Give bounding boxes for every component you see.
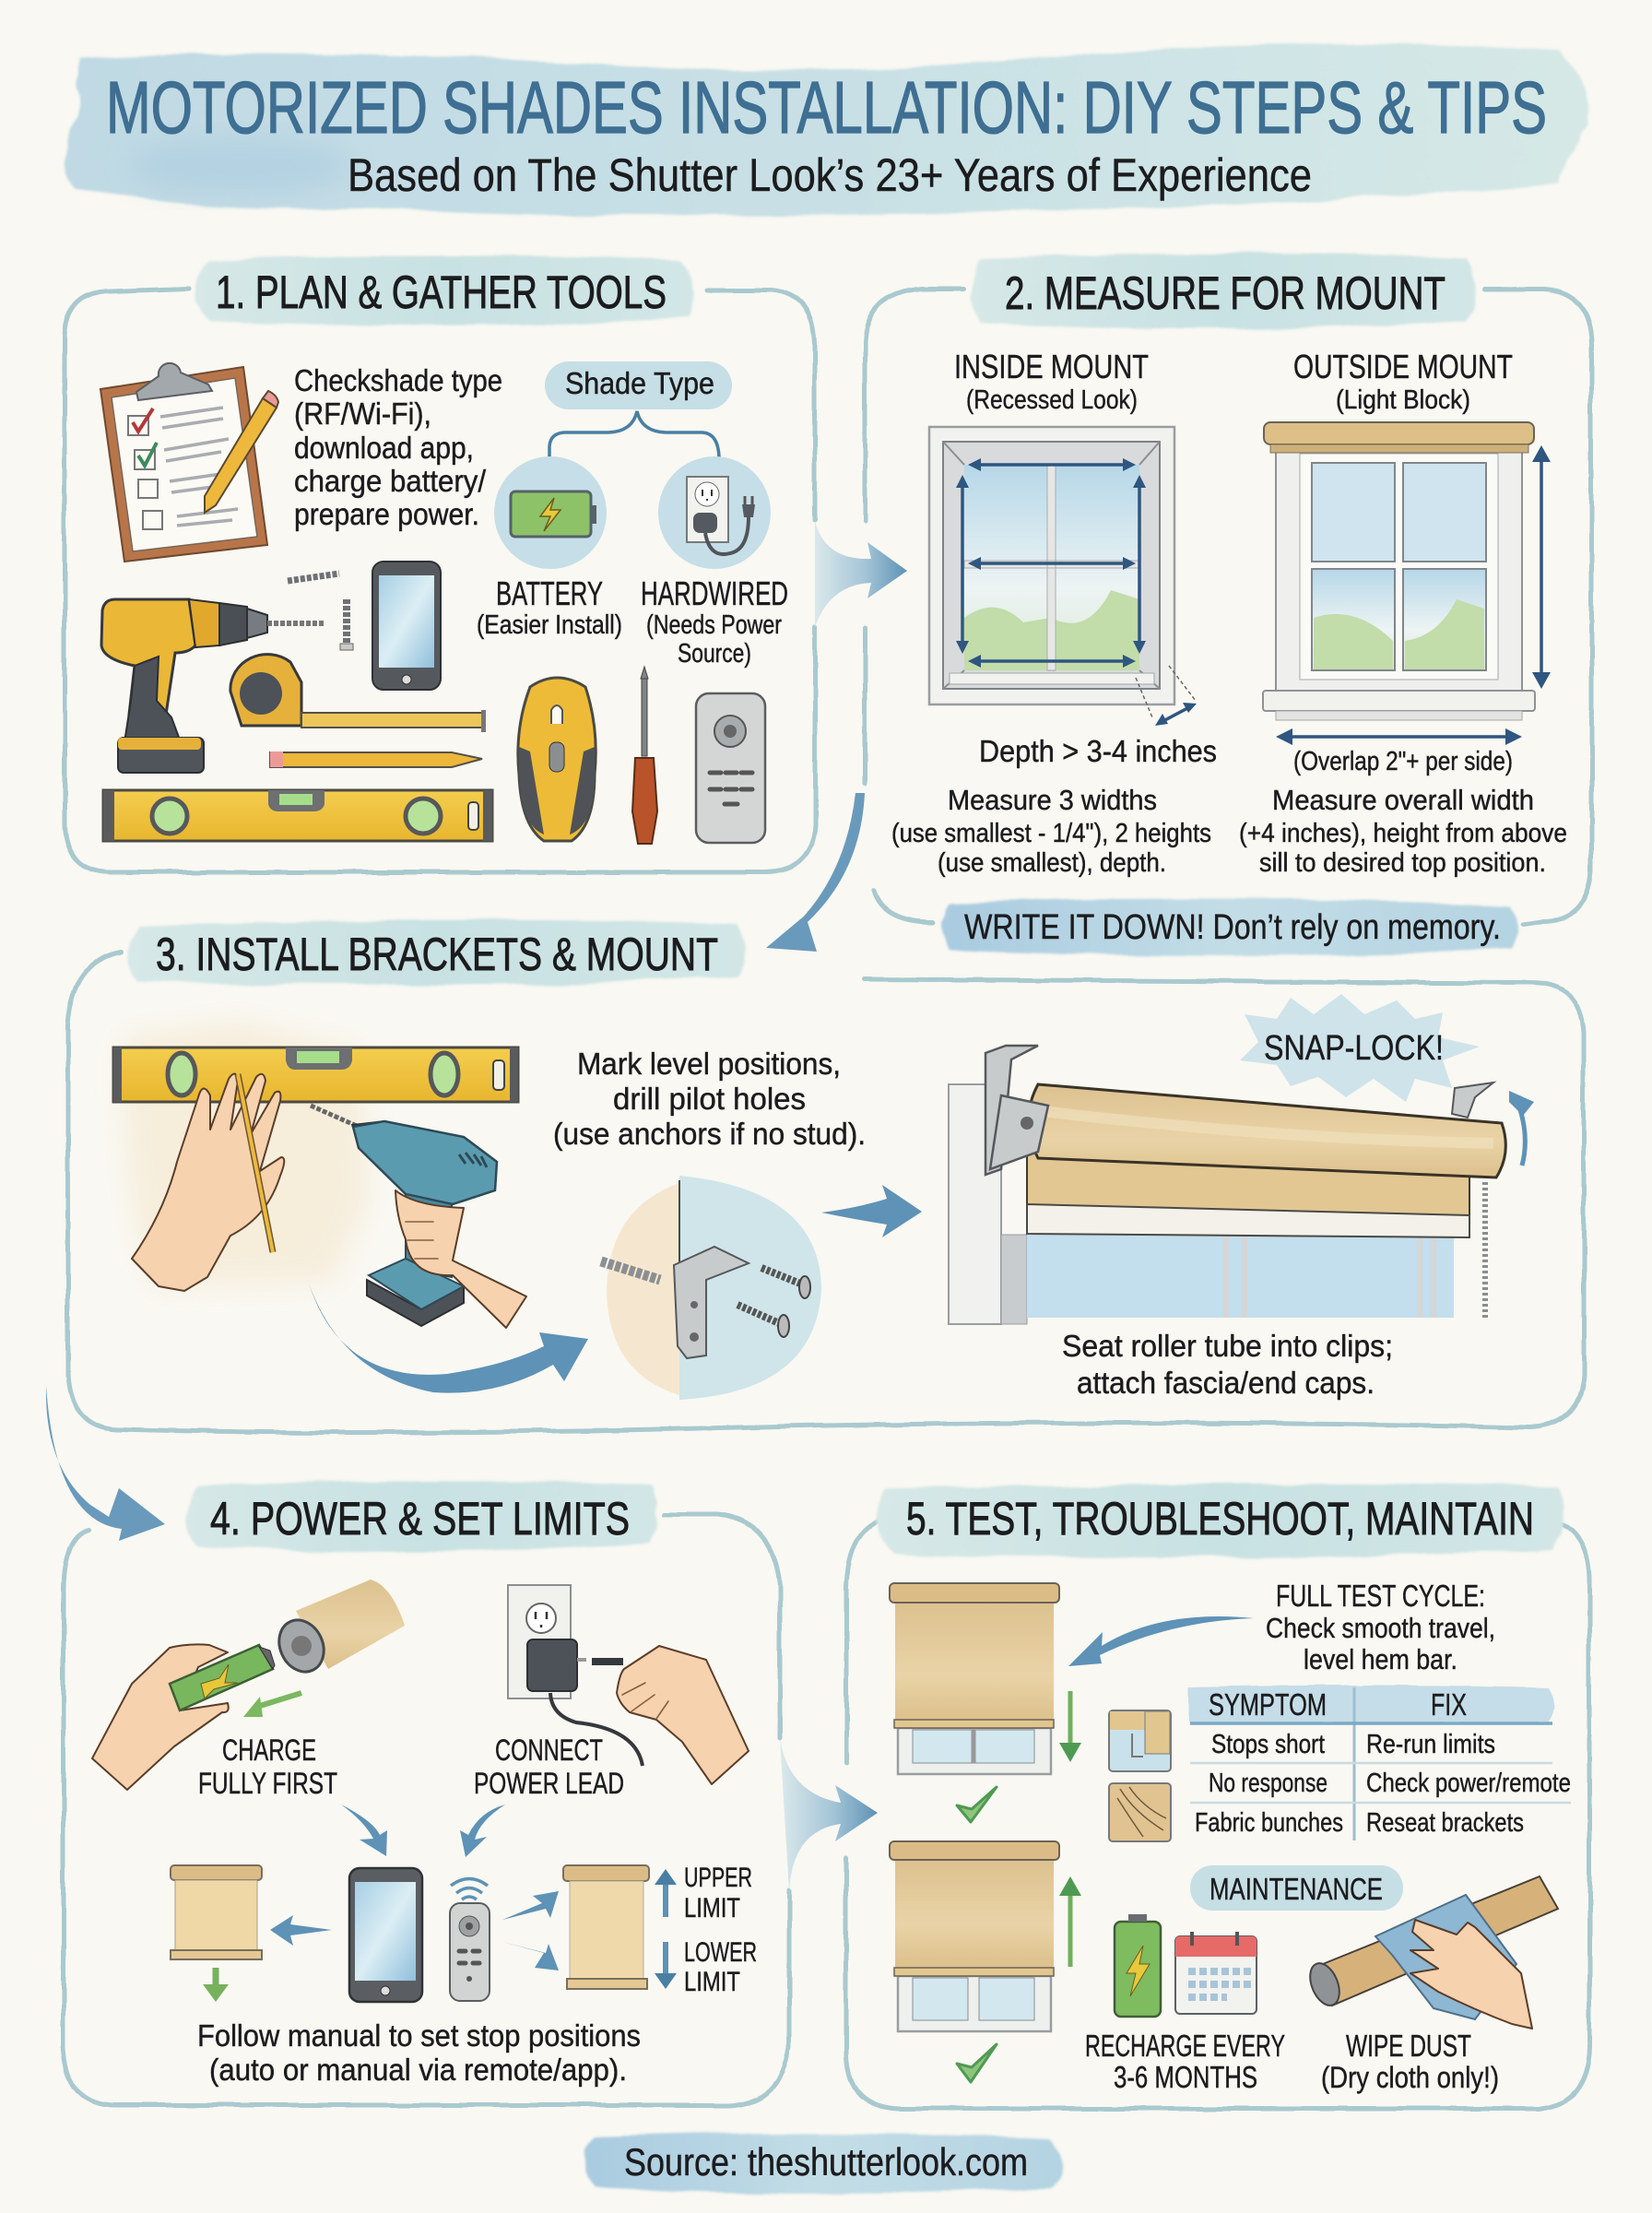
icon: phone [349, 1868, 422, 2002]
label: wipe dust: (Dry cloth only!) [1321, 2061, 1499, 2094]
icon: spirit level [103, 790, 492, 841]
heading pill 4: 4. POWER & SET LIMITS [210, 1493, 630, 1544]
label: hardwired: HARDWIRED [641, 574, 788, 612]
text: inside mount instructions: Measure 3 widths [948, 784, 1157, 816]
callout: write it down [941, 898, 1519, 955]
label: recharge: 3-6 MONTHS [1114, 2060, 1257, 2094]
shade type pill [545, 361, 732, 409]
label: hardwired: (Needs Power [646, 610, 782, 640]
icon: screws [288, 574, 353, 650]
arrow: step 2 to step 3 [766, 793, 865, 952]
text: plan instructions: charge battery/ [294, 464, 487, 498]
label: wipe dust: WIPE DUST [1346, 2029, 1471, 2063]
icon: check mark 1 [957, 1787, 997, 1822]
text: seat roller: Seat roller tube into clips; [1062, 1329, 1393, 1363]
heading pill 3: 3. INSTALL BRACKETS & MOUNT [156, 929, 718, 980]
text: full test cycle [1266, 1579, 1495, 1675]
table: symptom and fix: Check power/remote [1366, 1769, 1571, 1798]
subtitle: Based on The Shutter Look’s 23+ Years of Experience [348, 149, 1312, 201]
table: symptom and fix: Reseat brackets [1366, 1808, 1524, 1838]
footer source pill [585, 2133, 1062, 2193]
icon: small shade left [171, 1865, 262, 2002]
text: outside mount instructions: sill to desired top position. [1259, 848, 1546, 878]
heading pill 4 [186, 1480, 658, 1552]
label: charge fully first [198, 1734, 337, 1800]
label: charge fully first: FULLY FIRST [198, 1767, 337, 1800]
panel: 3 install brackets and mount [68, 920, 1584, 1433]
arrows: converge to controls [341, 1805, 505, 1857]
icon: hardwired outlet [658, 456, 771, 569]
text: mark positions: (use anchors if no stud). [553, 1117, 866, 1151]
label: battery: (Easier Install) [477, 610, 622, 640]
text: full test cycle: level hem bar. [1304, 1643, 1457, 1675]
thumbnail: fabric bunches [1109, 1783, 1171, 1841]
icon: stud finder [518, 678, 596, 841]
icon: hand with pencil [132, 1073, 284, 1291]
icon: phone [372, 562, 441, 690]
text: set stop positions: Follow manual to set stop positions [197, 2018, 641, 2053]
text: full test cycle: FULL TEST CYCLE: [1276, 1579, 1485, 1613]
detail: bracket close-up [601, 1176, 821, 1400]
text: set stop positions [197, 2018, 641, 2087]
panel: 4 power and set limits [64, 1480, 789, 2105]
text: outside mount instructions: (+4 inches), height from above [1239, 819, 1567, 848]
label: connect power lead: POWER LEAD [474, 1767, 624, 1800]
icon: remote [696, 693, 765, 843]
maintenance pill [1190, 1865, 1403, 1911]
note: overlap: (Overlap 2"+ per side) [1293, 747, 1513, 776]
icon: blue drill with hand [311, 1106, 526, 1328]
icon: wiping roller [1304, 1876, 1558, 2029]
text: plan instructions: download app, [294, 431, 474, 465]
arrow: test cycle to shade [1068, 1616, 1254, 1666]
label: recharge: RECHARGE EVERY [1085, 2029, 1285, 2063]
arrow: phone to shade [270, 1915, 332, 1946]
panel: 2 measure for mount [865, 253, 1591, 955]
icon: pencil [270, 751, 482, 767]
maintenance pill: MAINTENANCE [1210, 1872, 1383, 1906]
icon: calendar [1175, 1932, 1257, 2014]
icon: battery [1115, 1914, 1161, 2017]
shade type pill: Shade Type [565, 366, 714, 400]
label: recharge [1085, 2029, 1285, 2094]
text: plan instructions: (RF/Wi-Fi), [294, 396, 431, 431]
text: seat roller: attach fascia/end caps. [1077, 1366, 1375, 1400]
table: symptom and fix: Re-run limits [1366, 1730, 1495, 1759]
arrow: step 3 to step 4 [46, 1386, 165, 1541]
text: outside mount instructions: Measure overall width [1272, 784, 1534, 816]
table: symptom and fix [1189, 1686, 1571, 1840]
heading pill 1: 1. PLAN & GATHER TOOLS [216, 266, 667, 318]
heading pill 5 [878, 1484, 1564, 1557]
text: plan instructions [294, 363, 502, 531]
footer source pill: Source: theshutterlook.com [624, 2140, 1028, 2183]
heading pill 1 [195, 255, 693, 325]
text: seat roller [1062, 1329, 1393, 1400]
labels: limits: UPPER [684, 1863, 752, 1893]
icon: remote with wifi [450, 1879, 490, 2001]
diagram: inside mount window [929, 427, 1197, 726]
label: wipe dust [1321, 2029, 1499, 2094]
table: symptom and fix: Stops short [1211, 1730, 1325, 1759]
measurement arrows outside [1276, 445, 1551, 745]
table: symptom and fix: No response [1209, 1769, 1328, 1798]
label: charge fully first: CHARGE [222, 1734, 316, 1767]
icon: shade lowered [890, 1583, 1081, 1774]
arrow: to roller [821, 1185, 922, 1237]
depth arrow [1136, 666, 1197, 726]
icon: clipboard [100, 363, 278, 562]
table: symptom and fix: FIX [1431, 1687, 1467, 1722]
text: plan instructions: Checkshade type [294, 363, 502, 397]
illustration: roller shade on brackets [949, 1046, 1534, 1324]
label: hardwired [641, 574, 788, 669]
text: full test cycle: Check smooth travel, [1266, 1612, 1495, 1644]
label: outside mount: (Light Block) [1336, 385, 1470, 415]
label: connect power lead [474, 1734, 624, 1800]
text: set stop positions: (auto or manual via remote/app). [209, 2053, 627, 2087]
heading pill 2: 2. MEASURE FOR MOUNT [1005, 267, 1446, 319]
icon: shade raised [890, 1841, 1081, 2031]
icon: shade with limits [563, 1865, 677, 1989]
icon: level on wall [113, 1047, 518, 1102]
heading pill 2 [970, 253, 1476, 329]
label: hardwired: Source) [678, 639, 751, 669]
icon: tape measure [230, 655, 486, 732]
text: inside mount instructions: (use smallest - 1/4"), 2 heights [891, 819, 1211, 848]
snap-lock burst callout: SNAP-LOCK! [1264, 1029, 1444, 1068]
label: battery [477, 574, 622, 640]
icon: battery option [494, 456, 607, 569]
labels: limits: LIMIT [684, 1967, 740, 1997]
table: symptom and fix: Fabric bunches [1195, 1808, 1343, 1838]
text: mark positions: drill pilot holes [613, 1082, 806, 1116]
measurement arrows inside [956, 458, 1146, 668]
label: battery: BATTERY [496, 574, 603, 612]
label: inside mount [954, 348, 1149, 415]
labels: limits: LIMIT [684, 1893, 740, 1923]
heading pill 3 [128, 920, 746, 986]
label: outside mount [1293, 348, 1513, 415]
connector: shade type branches [549, 411, 719, 457]
table: symptom and fix: SYMPTOM [1209, 1687, 1327, 1722]
arrow: step 4 to step 5 [780, 1738, 878, 1890]
labels: limits [684, 1863, 757, 1997]
text: inside mount instructions [891, 784, 1211, 878]
panel: 1 plan and gather tools [65, 255, 815, 872]
title banner [65, 44, 1588, 216]
text: outside mount instructions [1239, 784, 1567, 878]
text: mark positions: Mark level positions, [577, 1047, 841, 1081]
illustration: battery insertion [92, 1580, 405, 1790]
arrow: curved to bracket [309, 1284, 588, 1393]
labels: limits: LOWER [684, 1937, 757, 1968]
text: plan instructions: prepare power. [294, 497, 479, 531]
note: depth: Depth > 3-4 inches [979, 734, 1217, 768]
label: connect power lead: CONNECT [495, 1734, 603, 1767]
label: inside mount: (Recessed Look) [966, 385, 1138, 415]
panel: 5 test troubleshoot maintain [846, 1484, 1589, 2109]
illustration: outlet and power lead [508, 1585, 749, 1784]
thumbnail: stops short [1109, 1710, 1171, 1771]
label: inside mount: INSIDE MOUNT [954, 348, 1149, 385]
arrows: remote to shade [502, 1891, 559, 1970]
text: mark positions [553, 1047, 866, 1151]
snap-lock burst callout [1240, 994, 1480, 1102]
text: inside mount instructions: (use smallest), depth. [938, 848, 1166, 878]
arrow: step 1 to step 2 [815, 521, 907, 627]
wall wash [124, 1022, 369, 1286]
icon: check mark 2 [957, 2044, 997, 2082]
label: outside mount: OUTSIDE MOUNT [1293, 348, 1513, 385]
icon: screwdriver [632, 667, 657, 844]
icon: yellow drill [101, 599, 325, 773]
diagram: outside mount window [1263, 422, 1551, 745]
callout: write it down: WRITE IT DOWN! Don’t rely on memory. [964, 908, 1501, 947]
